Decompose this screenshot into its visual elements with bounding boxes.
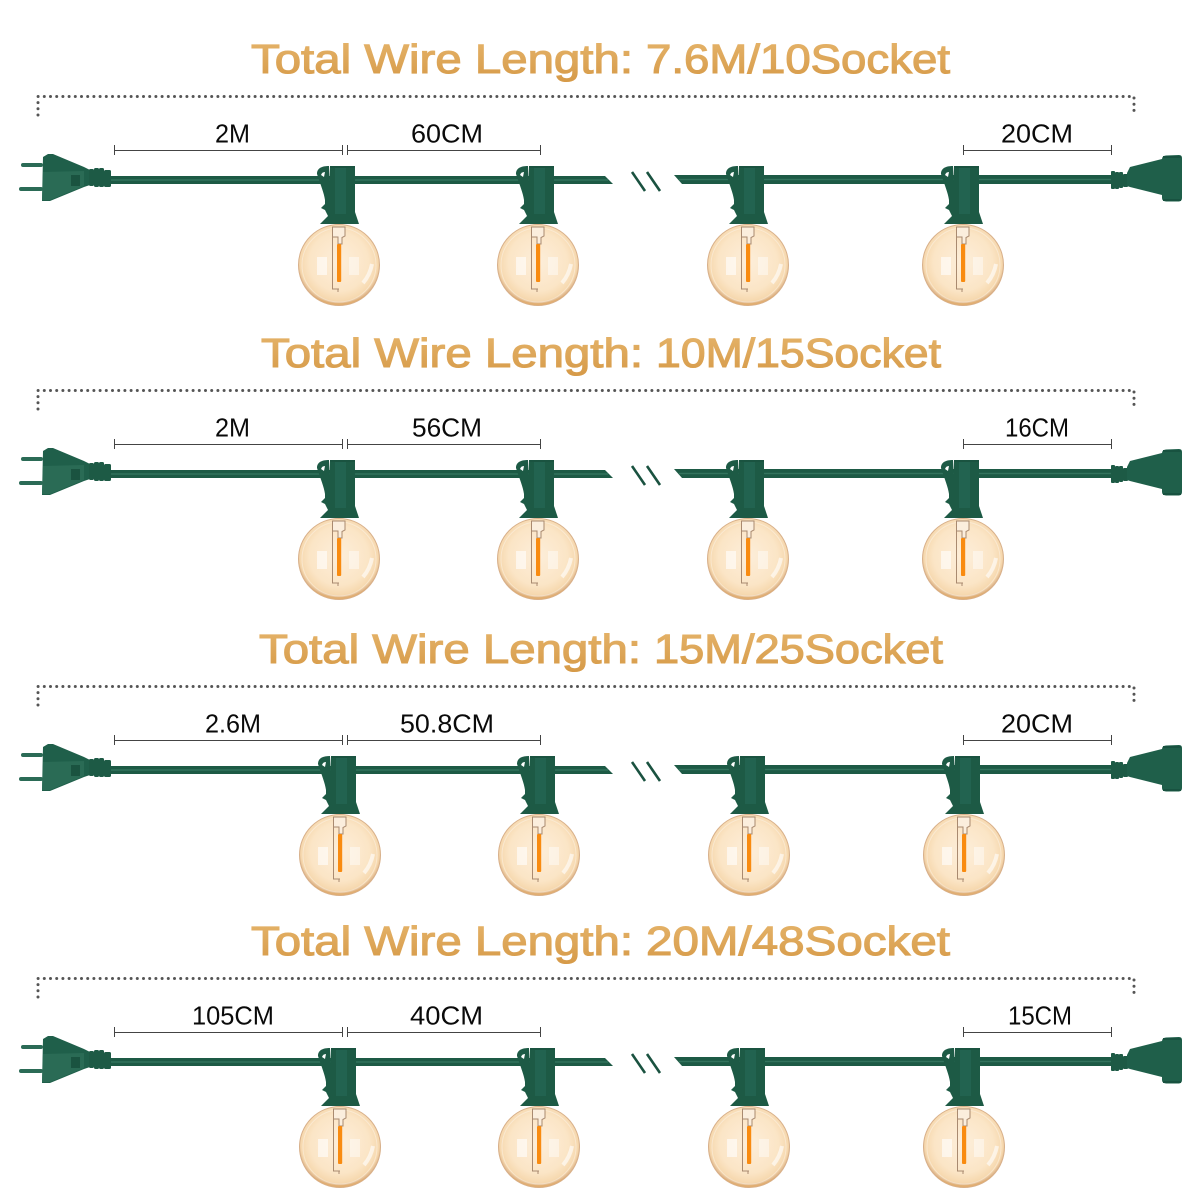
title: 20M/48Socket: 20M/48Socket [646,918,951,964]
socket with bulb 4 [924,756,1004,896]
socket with bulb 1 [300,1048,380,1188]
wire with break mark [110,1054,1112,1073]
total length dotted bracket [38,686,1134,705]
title: 20M/48Socket: Total Wire Length: [251,918,633,964]
icon: input plug [19,154,111,201]
dimension: 2M: 2M [215,118,250,148]
title: 10M/15Socket [261,330,942,376]
dimension: 50.8CM [347,708,541,745]
title: 15M/25Socket [259,626,944,672]
dimension: 2.6M: 2.6M [205,708,261,738]
dimension: 60CM [347,118,541,155]
icon: end connector [1111,1037,1182,1084]
panel: 15M / 25 socket [19,626,1182,896]
dimension: 105CM: 105CM [192,1000,274,1030]
panel: 20M / 48 socket [19,918,1182,1188]
icon: end connector [1111,449,1182,496]
dimension: 20CM [963,708,1112,745]
socket with bulb 4 [922,460,1004,600]
dimension: 20CM [963,118,1112,155]
title: 7.6M/10Socket: 7.6M/10Socket [646,36,951,82]
dimension: 105CM [114,1000,342,1037]
icon: end connector [1111,745,1182,792]
wire with break mark [110,762,1112,781]
dimension: 50.8CM: 50.8CM [400,708,494,738]
title: 10M/15Socket: 10M/15Socket [656,330,942,376]
title: 10M/15Socket: Total Wire Length: [261,330,643,376]
panel: 7.6M / 10 socket [19,36,1182,306]
icon: input plug [19,448,111,495]
icon: input plug [19,744,111,791]
total length dotted bracket [38,978,1134,997]
panel: 10M / 15 socket [19,330,1182,600]
wire with break mark [110,466,1112,485]
dimension: 20CM: 20CM [1001,708,1073,738]
total length dotted bracket [38,96,1134,115]
title: 15M/25Socket: 15M/25Socket [654,626,944,672]
socket with bulb 3 [708,756,790,896]
dimension: 56CM [347,412,541,449]
dimension: 2M [114,412,342,449]
dimension: 16CM: 16CM [1005,412,1069,442]
title: 15M/25Socket: Total Wire Length: [259,626,641,672]
socket with bulb 2 [498,1048,580,1188]
dimension: 56CM: 56CM [412,412,482,442]
socket with bulb 3 [708,1048,790,1188]
dimension: 20CM: 20CM [1001,118,1073,148]
dimension: 60CM: 60CM [411,118,483,148]
socket with bulb 2 [498,756,580,896]
dimension: 40CM [347,1000,541,1037]
dimension: 16CM [963,412,1112,449]
title: 20M/48Socket [251,918,951,964]
title: 7.6M/10Socket: Total Wire Length: [251,36,633,82]
dimension: 40CM: 40CM [410,1000,483,1030]
dimension: 2M [114,118,342,155]
dimension: 2.6M [114,708,342,745]
socket with bulb 1 [298,460,380,600]
socket with bulb 1 [298,166,380,306]
icon: end connector [1111,155,1182,202]
wire with break mark [110,172,1112,191]
dimension: 15CM: 15CM [1008,1000,1072,1030]
socket with bulb 2 [498,166,578,306]
dimension: 15CM [963,1000,1112,1037]
socket with bulb 2 [498,460,578,600]
icon: input plug [19,1036,111,1083]
socket with bulb 3 [708,460,788,600]
total length dotted bracket [38,390,1134,409]
socket with bulb 4 [924,1048,1004,1188]
socket with bulb 3 [708,166,788,306]
title: 7.6M/10Socket [251,36,951,82]
dimension: 2M: 2M [215,412,250,442]
socket with bulb 4 [922,166,1004,306]
socket with bulb 1 [300,756,380,896]
